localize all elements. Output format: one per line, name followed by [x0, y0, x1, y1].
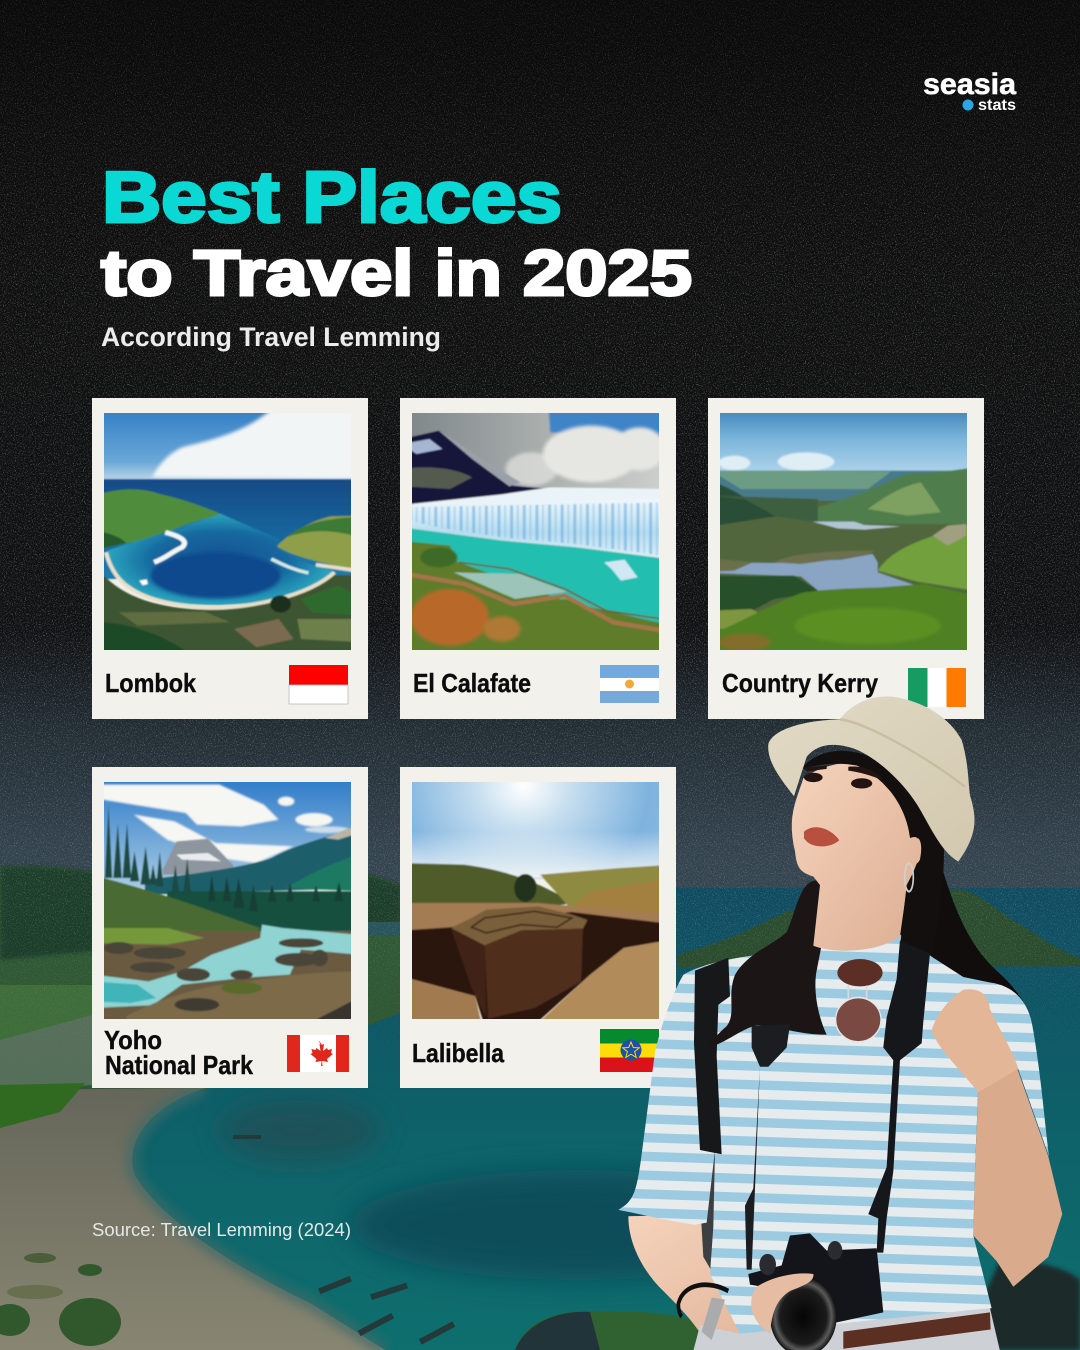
logo: seasia stats: stats: [978, 97, 1016, 114]
woman traveller with hat and camera: [618, 696, 1062, 1350]
flag: Canada: [287, 1035, 349, 1072]
camera: [748, 1233, 883, 1350]
eyes and brows: [803, 765, 883, 789]
label: El Calafate: [413, 668, 531, 698]
hair behind: [893, 851, 1030, 1018]
panel: Yoho National Park card: [92, 767, 368, 1088]
raised arm: [973, 1067, 1062, 1287]
hair around face: [800, 751, 944, 953]
panel: Lalibella card: [400, 767, 676, 1088]
label: [104, 1025, 253, 1080]
flag: Ireland: [908, 668, 966, 707]
neck strap: [868, 941, 930, 1253]
flag: Ethiopia: [600, 1029, 659, 1072]
sunglasses: [836, 959, 883, 1042]
backpack strap: [694, 958, 730, 1154]
title: [101, 158, 692, 309]
flag: Indonesia: [289, 665, 348, 704]
flag: Argentina: [600, 665, 659, 703]
backpack lower body: [697, 1141, 727, 1274]
photo: rock-hewn church: [412, 782, 659, 1019]
trousers and belt: [693, 1308, 1000, 1350]
left strap: [745, 1024, 790, 1270]
panel: El Calafate card: [400, 398, 676, 719]
source note: Source: Travel Lemming (2024): [92, 1220, 351, 1240]
ponytail hair: [710, 880, 827, 1047]
watch and bracelet: [702, 1297, 725, 1340]
straw hat: [768, 696, 974, 862]
photo: Perito Moreno glacier: [412, 413, 659, 650]
logo: seasia stats: seasia: [923, 68, 1016, 101]
label: National Park: [105, 1050, 253, 1080]
label: Country Kerry: [722, 668, 878, 698]
gripping fingers: [751, 1273, 813, 1334]
label: Lalibella: [412, 1038, 504, 1068]
fist: [932, 989, 1018, 1092]
label: Yoho: [104, 1025, 162, 1055]
striped shirt: [618, 932, 1049, 1334]
lips: [804, 827, 839, 846]
photo: Killarney lakes: [720, 413, 967, 650]
title: Best Places: [102, 158, 562, 238]
subtitle: According Travel Lemming: [101, 322, 441, 352]
title: to Travel in 2025: [101, 237, 692, 309]
far arm and hand: [628, 1214, 843, 1350]
hoop earring: [905, 863, 913, 892]
label: Lombok: [105, 668, 196, 698]
photo: Yoho river and mountains: [104, 782, 351, 1019]
panel: Country Kerry card: [708, 398, 984, 719]
photo: Lombok bay: [104, 413, 351, 650]
panel: Lombok card: [92, 398, 368, 719]
face and neck: [792, 763, 924, 951]
